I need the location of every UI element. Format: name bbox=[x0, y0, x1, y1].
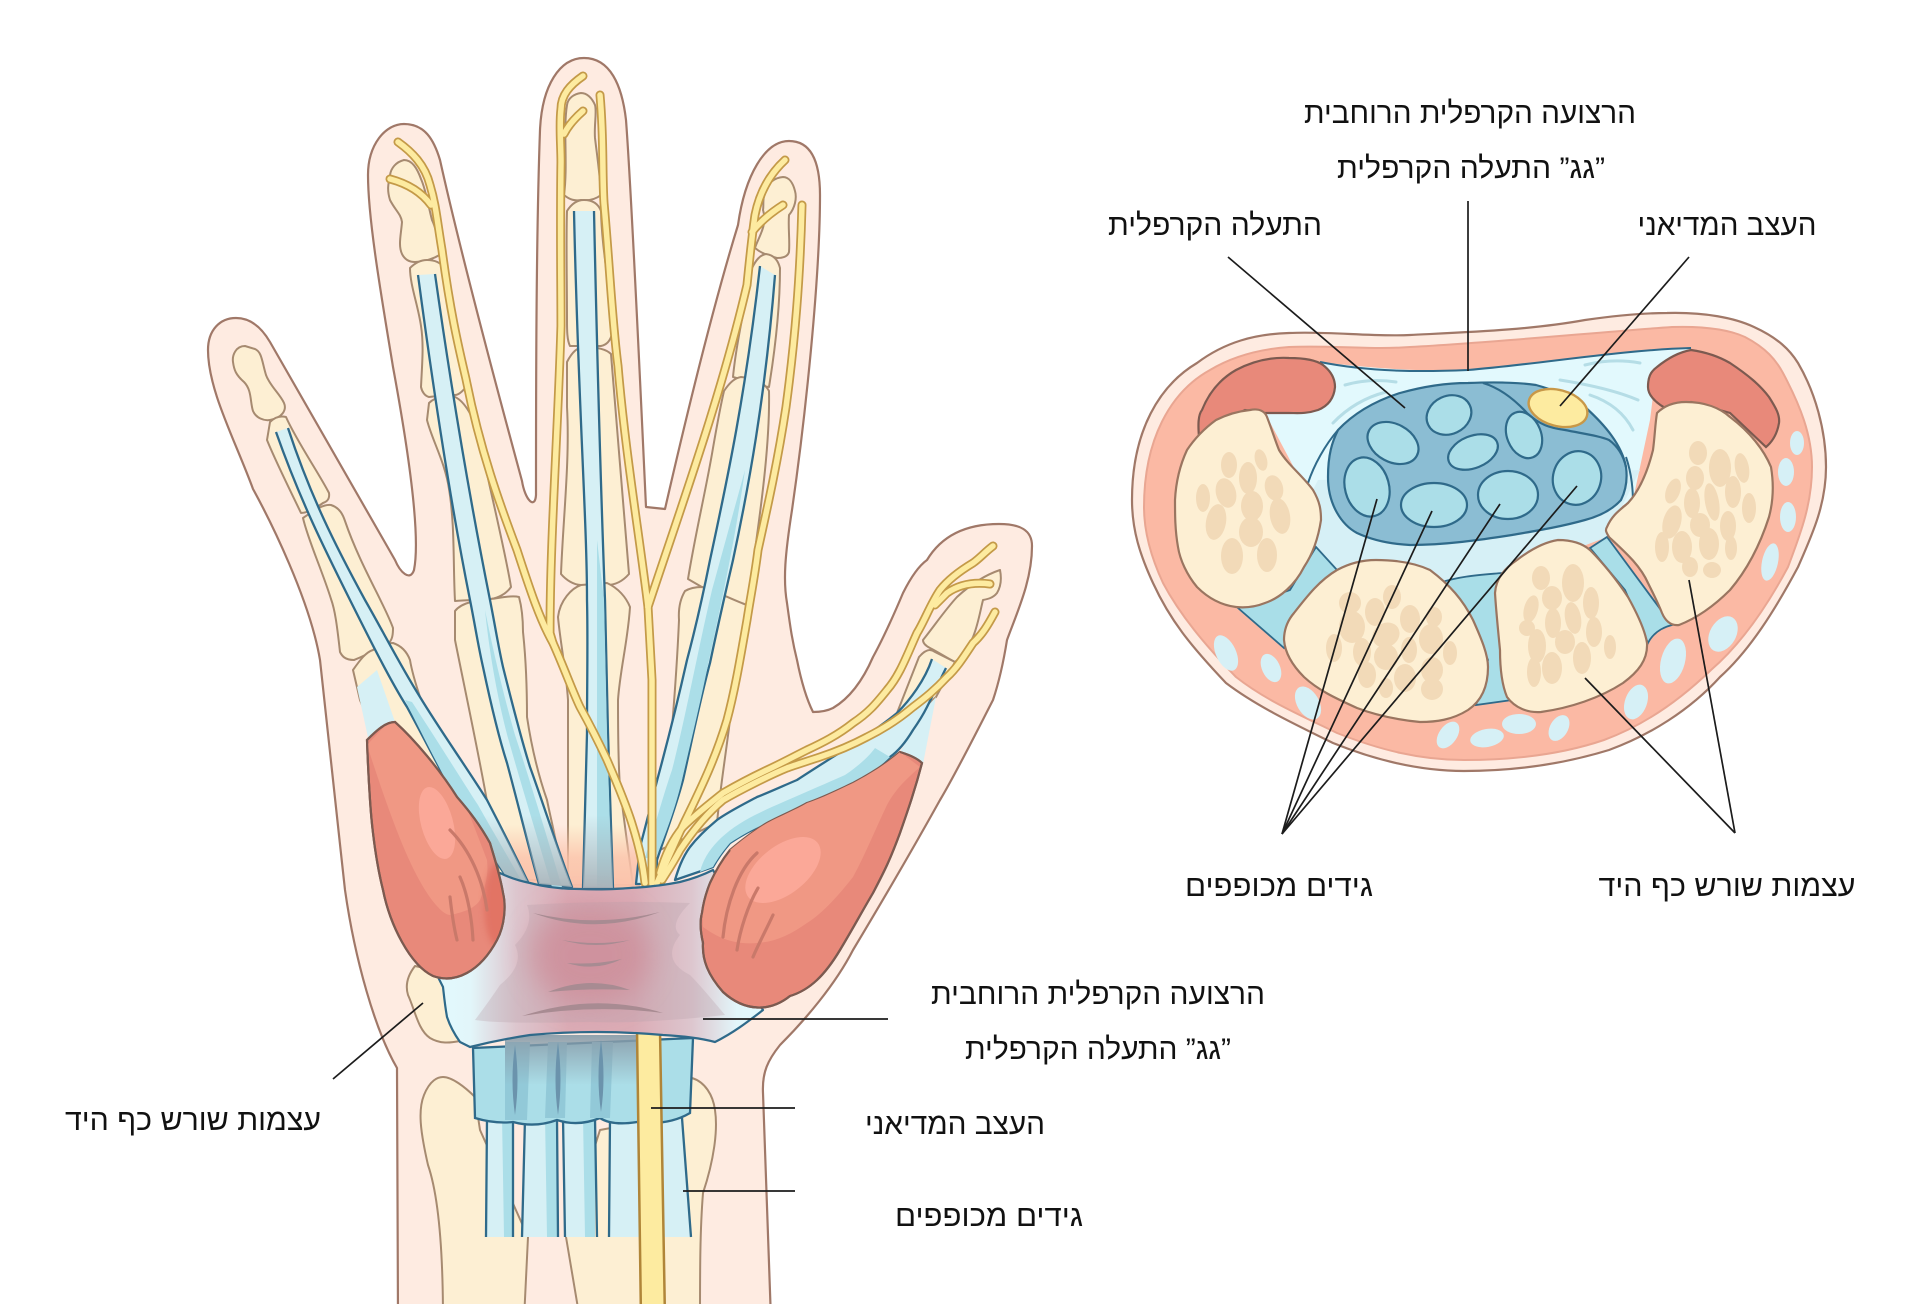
tendon sheath block bbox=[473, 1035, 693, 1125]
tendon: little finger bbox=[276, 428, 528, 882]
carpal bone bbox=[407, 966, 480, 1043]
canal sheath bbox=[1328, 382, 1627, 545]
label: carpal bones (hand): עצמות שורש כף היד bbox=[65, 1104, 321, 1137]
tendon: middle finger bbox=[574, 211, 613, 888]
ligament fibres bbox=[1333, 361, 1640, 430]
tendon: ring finger bbox=[418, 274, 572, 887]
label: transverse carpal ligament (section): הרצועה הקרפלית הרוחבית bbox=[1304, 97, 1636, 130]
tendons in canal bbox=[1420, 388, 1478, 442]
muscle: left cross-section bbox=[1198, 358, 1335, 437]
leader lines: cross-section bbox=[1228, 201, 1735, 834]
cut-off at the bottom of the hand bbox=[380, 1304, 790, 1307]
tendon: thumb bbox=[675, 659, 946, 880]
carpal bone: bottom right bbox=[1495, 540, 1647, 712]
pink subcutaneous layer bbox=[1144, 327, 1812, 760]
label: carpal tunnel roof (section): ”גג” התעלה הקרפלית bbox=[1337, 152, 1605, 185]
median nerve at wrist bbox=[637, 1030, 665, 1307]
hand skin outline bbox=[208, 58, 1032, 1307]
grey fog on tendons bbox=[483, 820, 613, 888]
label: carpal tunnel: התעלה הקרפלית bbox=[1108, 209, 1322, 242]
tunnel outline arcs bbox=[1308, 430, 1633, 505]
ring finger bones bbox=[388, 160, 562, 880]
roof line bbox=[1320, 348, 1691, 371]
thumb bones bbox=[897, 570, 1001, 730]
carpal bone: right bbox=[1606, 402, 1773, 625]
flexor tendons bbox=[276, 211, 946, 890]
blue insertion patches bbox=[357, 670, 936, 764]
panel: hand anatomy bbox=[208, 58, 1032, 1307]
carpal tunnel contents bbox=[1328, 382, 1627, 545]
label: flexor tendons (hand): גידים מכופפים bbox=[895, 1200, 1083, 1233]
little finger bones bbox=[233, 346, 500, 880]
label: median nerve (hand): העצב המדיאני bbox=[865, 1108, 1045, 1141]
panel: wrist cross-section bbox=[1132, 313, 1826, 771]
carpal bone: bottom left bbox=[1284, 560, 1488, 722]
index finger bones bbox=[660, 177, 796, 850]
leader lines: hand bbox=[333, 1003, 888, 1191]
retinaculum space bbox=[1265, 348, 1691, 600]
median nerve section bbox=[1524, 383, 1592, 433]
lower flexor tendons bbox=[486, 1115, 691, 1237]
muscle: hypothenar bbox=[367, 715, 512, 978]
label: carpal tunnel roof (hand): ”גג” התעלה הקרפלית bbox=[965, 1033, 1231, 1066]
tendon: index finger bbox=[636, 266, 775, 884]
carpal bone: left bbox=[1175, 409, 1321, 607]
label: median nerve (section): העצב המדיאני bbox=[1638, 209, 1816, 242]
wrist bones: radius and ulna bbox=[421, 1077, 716, 1307]
muscle: right cross-section bbox=[1648, 350, 1779, 447]
label: transverse carpal ligament (hand): הרצועה הקרפלית הרוחבית bbox=[931, 978, 1265, 1011]
label: flexor tendons (section): גידים מכופפים bbox=[1185, 870, 1373, 903]
middle finger bones bbox=[558, 93, 633, 885]
transverse carpal ligament bbox=[438, 870, 763, 1047]
muscle: thenar bbox=[700, 752, 922, 1008]
ligament inner shading bbox=[475, 902, 725, 1023]
fat spots bbox=[1209, 431, 1804, 752]
outer skin bbox=[1132, 313, 1826, 771]
carpal ligaments between bones bbox=[1238, 537, 1672, 705]
peach fog behind tendons bbox=[505, 825, 640, 890]
label: carpal bones (section): עצמות שורש כף היד bbox=[1598, 870, 1856, 903]
median nerve branches bbox=[390, 76, 995, 884]
lower tunnel space bbox=[1308, 470, 1640, 590]
wrinkles bbox=[522, 912, 663, 1016]
